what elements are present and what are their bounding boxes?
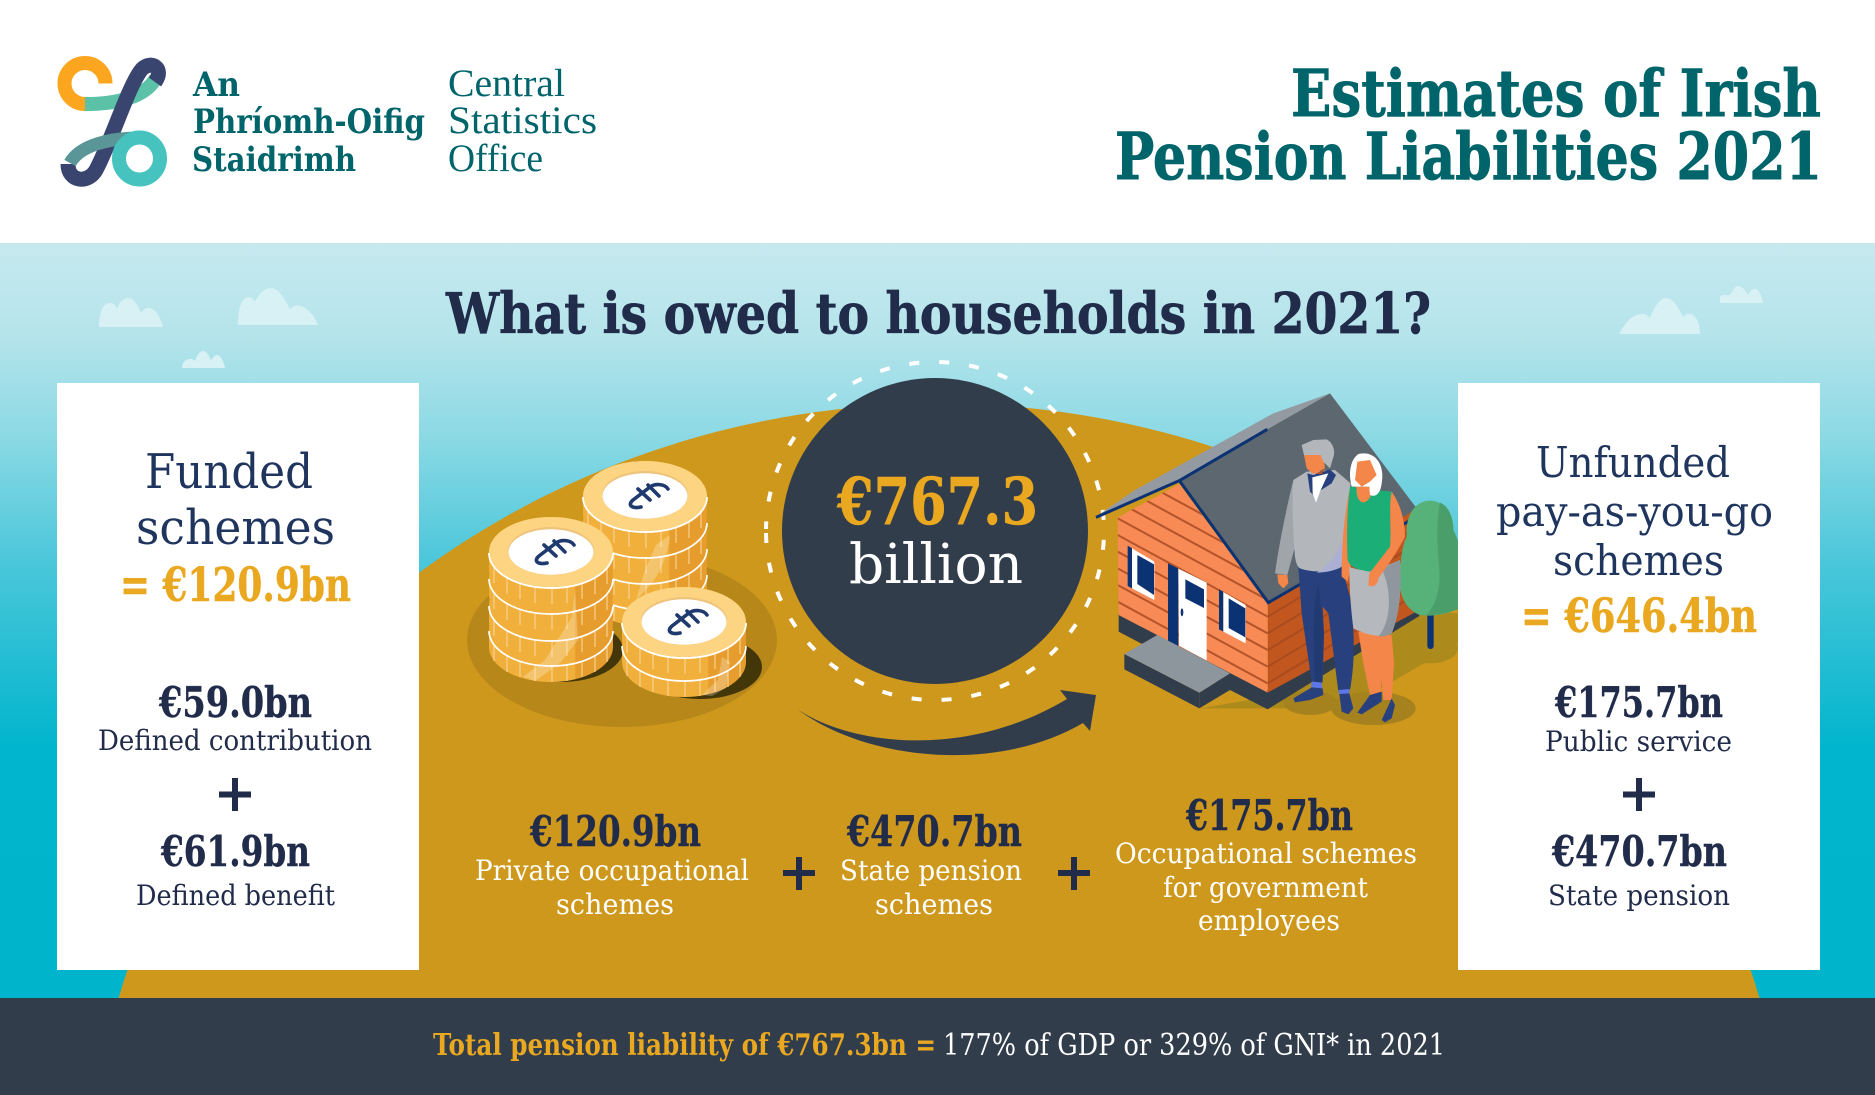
icon: stacks of euro coins [467, 461, 777, 727]
breakdown: occupational schemes for government employees: employees [1198, 904, 1340, 937]
icon: CSO knot mark [64, 63, 160, 180]
logo text: Irish name: Phríomh-Oifig [193, 102, 425, 142]
tree [1427, 610, 1434, 649]
breakdown: state pension schemes: State pension [840, 854, 1022, 887]
hill [118, 404, 1760, 1000]
logo text: English name: Central [448, 62, 565, 105]
header logo: Central Statistics Office [64, 62, 597, 180]
left wall [1118, 484, 1268, 692]
step [1124, 654, 1199, 708]
funded heading [136, 444, 335, 556]
unfunded heading [1496, 438, 1773, 585]
funded total: = €120.9bn [120, 558, 351, 613]
breakdown: occupational schemes for government employees: for government [1163, 871, 1369, 904]
woman [1342, 453, 1405, 722]
breakdown: state pension schemes: €470.7bn [846, 807, 1022, 856]
defined contribution label: Defined contribution [98, 724, 372, 757]
state pension value: €470.7bn [1551, 827, 1727, 876]
breakdown: occupational schemes for government employees: Occupational schemes [1115, 837, 1417, 870]
right wall [1268, 511, 1415, 692]
windows and door [1128, 546, 1132, 588]
footer bar [0, 998, 1875, 1095]
defined benefit label: Defined benefit [136, 879, 336, 912]
defined benefit value: €61.9bn [160, 827, 310, 876]
man [1275, 439, 1354, 714]
total circle [766, 362, 1104, 700]
breakdown: private occupational schemes: schemes [556, 888, 674, 921]
plus [783, 857, 815, 890]
total unit: billion [849, 532, 1023, 596]
logo text: English name: Office [448, 137, 543, 180]
unfunded total: = €646.4bn [1521, 589, 1757, 644]
logo text: Irish name: Staidrimh [192, 140, 356, 180]
breakdown: private occupational schemes: €120.9bn [529, 807, 701, 856]
illustration: house, couple and tree [1095, 393, 1463, 725]
plus [219, 778, 251, 811]
background: sky [0, 243, 1875, 1000]
roof [1179, 393, 1417, 603]
public service label: Public service [1545, 725, 1732, 758]
logo text: Irish name [192, 65, 425, 180]
logo text: English name [448, 62, 597, 180]
total value: €767.3 [836, 464, 1038, 540]
public service value: €175.7bn [1554, 678, 1723, 727]
title [1115, 56, 1822, 195]
footer highlight text: Total pension liability of €767.3bn = [433, 1028, 936, 1063]
breakdown: occupational schemes for government employees: €175.7bn [1185, 791, 1353, 840]
panel: funded schemes [57, 383, 419, 970]
logo text: English name: Statistics [448, 99, 597, 142]
clouds [99, 286, 1763, 368]
funded heading: schemes [136, 500, 335, 556]
arrow [797, 690, 1096, 755]
unfunded heading: pay-as-you-go [1496, 487, 1773, 536]
plus [1623, 778, 1655, 811]
state pension label: State pension [1548, 879, 1730, 912]
foundation [1119, 607, 1419, 709]
plus [1058, 857, 1090, 890]
breakdown: private occupational schemes [475, 807, 749, 921]
funded heading: Funded [145, 444, 313, 500]
breakdown: private occupational schemes: Private occupational [475, 854, 749, 887]
footer text: 177% of GDP or 329% of GNI* in 2021 [943, 1028, 1445, 1063]
breakdown: state pension schemes [840, 807, 1022, 921]
unfunded heading: schemes [1553, 536, 1724, 585]
heading: What is owed to households in 2021? [445, 281, 1431, 347]
logo text: Irish name: An [192, 65, 240, 105]
panel: unfunded schemes [1458, 383, 1820, 970]
breakdown: occupational schemes for government employees [1115, 791, 1417, 937]
unfunded heading: Unfunded [1536, 438, 1730, 487]
defined contribution value: €59.0bn [158, 678, 312, 727]
breakdown: state pension schemes: schemes [875, 888, 993, 921]
